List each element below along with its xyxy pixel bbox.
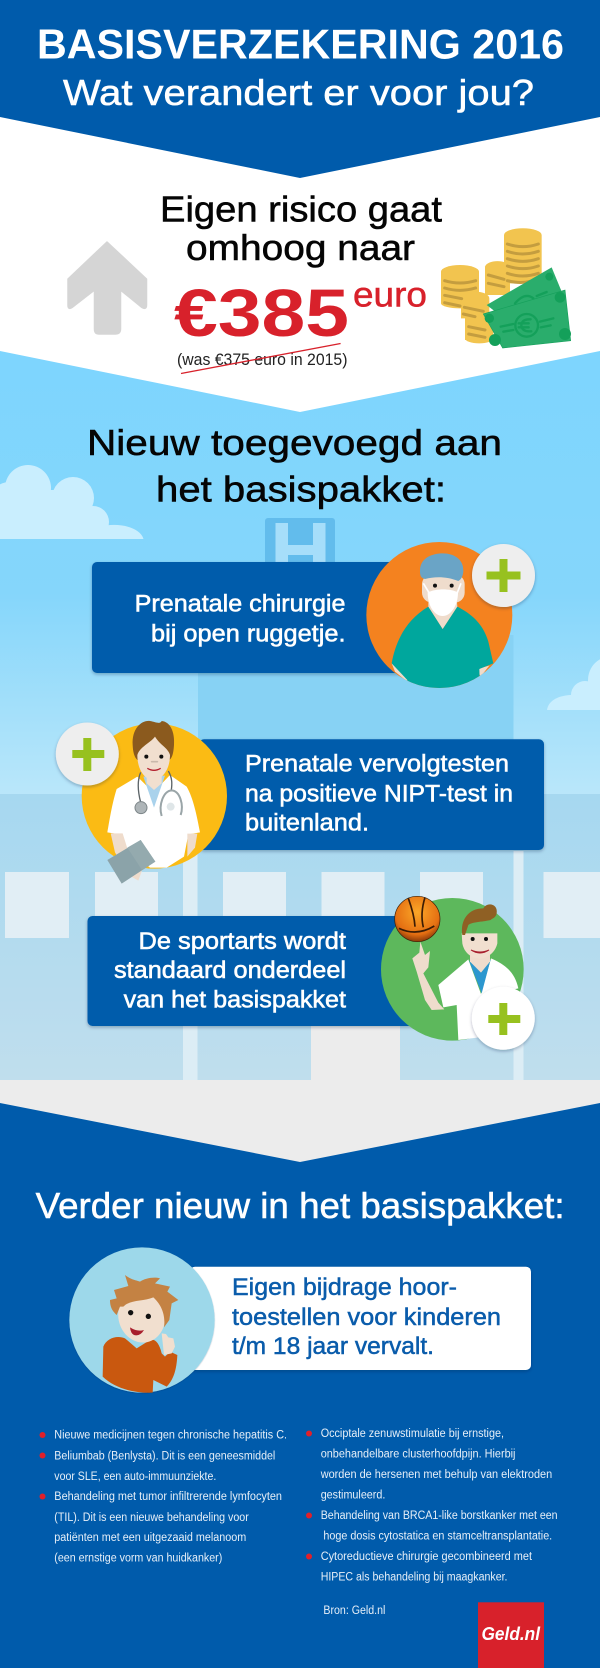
amount: 385 euro: euro <box>353 276 427 315</box>
panel: prenatale vervolgtesten: Prenatale vervolgtesten <box>245 751 509 778</box>
panel: sportarts: van het basispakket <box>124 987 346 1014</box>
bullet list right: Behandeling van BRCA1-like borstkanker met een <box>321 1510 558 1522</box>
bullet list right: HIPEC als behandeling bij maagkanker. <box>321 1571 508 1583</box>
hospital tower <box>198 635 514 805</box>
icon: plus badge <box>472 544 535 607</box>
panel: eigen bijdrage <box>190 1267 531 1370</box>
bullet list right: Occiptale zenuwstimulatie bij ernstige, <box>321 1428 504 1440</box>
icon: plus badge <box>472 987 535 1050</box>
heading: nieuw toegevoegd: het basispakket: <box>156 469 446 510</box>
pavement <box>0 1080 600 1170</box>
panel: prenatale vervolgtesten: na positieve NIPT-test in <box>245 781 513 808</box>
heading: eigen risico: omhoog naar <box>186 227 415 268</box>
title: BASISVERZEKERING 2016 <box>37 20 564 68</box>
icon: surgeon <box>366 542 512 692</box>
bullet list left: voor SLE, een auto-immuunziekte. <box>54 1471 216 1483</box>
heading: eigen risico <box>160 189 442 268</box>
bullet list right: hoge dosis cytostatica en stamceltransplantatie. <box>323 1530 552 1542</box>
logo: Geld.nl <box>478 1602 544 1668</box>
source: Bron: Geld.nl <box>323 1605 385 1617</box>
heading: nieuw toegevoegd: Nieuw toegevoegd aan <box>87 422 502 463</box>
hospital windows <box>5 872 600 938</box>
cloud right <box>547 656 600 710</box>
panel: sportarts <box>88 916 418 1026</box>
hospital pillars <box>183 851 524 1081</box>
bullet list right: Cytoreductieve chirurgie gecombineerd met <box>321 1551 533 1563</box>
white band <box>0 100 600 412</box>
previous amount: (was €375 euro in 2015) <box>177 351 348 369</box>
bullet list left: Nieuwe medicijnen tegen chronische hepatitis C. <box>54 1430 287 1442</box>
bullet list left <box>40 1430 287 1565</box>
bullet list right <box>306 1428 558 1583</box>
panel: sportarts: De sportarts wordt <box>138 928 346 955</box>
panel: eigen bijdrage: Eigen bijdrage hoor- <box>232 1274 457 1301</box>
heading: nieuw toegevoegd <box>87 422 502 510</box>
panel: prenatale vervolgtesten: buitenland. <box>245 810 369 837</box>
icon: plus badge <box>56 722 119 786</box>
subtitle: Wat verandert er voor jou? <box>63 72 534 113</box>
bullet list right: worden de hersenen met behulp van elektroden <box>320 1469 552 1481</box>
hospital lower band <box>0 794 600 1084</box>
icon: sports doctor <box>381 896 524 1041</box>
icon: up arrow <box>68 242 146 334</box>
panel: prenatale chirurgie: Prenatale chirurgie <box>135 591 346 618</box>
panel: prenatale chirurgie <box>92 562 412 673</box>
bullet list left: (een ernstige vorm van huidkanker) <box>54 1553 222 1565</box>
bullet list left: patiënten met een uitgezaaid melanoom <box>54 1532 246 1544</box>
hospital sign <box>265 518 335 570</box>
previous amount <box>177 344 348 374</box>
panel: prenatale vervolgtesten <box>199 739 544 850</box>
panel: eigen bijdrage: toestellen voor kinderen <box>232 1304 501 1331</box>
bullet list left: Behandeling met tumor infiltrerende lymfocyten <box>54 1491 282 1503</box>
bullet list left: Beliumbab (Benlysta). Dit is een geneesmiddel <box>54 1450 275 1462</box>
amount: 385 euro: €385 <box>174 276 349 351</box>
bullet list right: onbehandelbare clusterhoofdpijn. Hierbij <box>321 1448 516 1460</box>
footer section background <box>0 1103 600 1668</box>
icon: coins and money <box>441 228 571 348</box>
panel: sportarts: standaard onderdeel <box>114 957 346 984</box>
bullet list right: gestimuleerd. <box>321 1489 385 1501</box>
bullet list left: (TIL). Dit is een nieuwe behandeling voor <box>54 1512 249 1524</box>
panel: eigen bijdrage: t/m 18 jaar vervalt. <box>232 1333 434 1360</box>
icon: female doctor <box>82 721 227 884</box>
panel: prenatale chirurgie: bij open ruggetje. <box>151 621 346 648</box>
background: sky <box>0 340 600 800</box>
logo: Geld.nl: Geld.nl <box>482 1624 541 1644</box>
icon: child <box>69 1247 215 1393</box>
heading: verder nieuw: Verder nieuw in het basispakket: <box>36 1185 565 1226</box>
amount: 385 euro <box>174 276 427 351</box>
hospital door <box>311 1000 400 1082</box>
heading: eigen risico: Eigen risico gaat <box>160 189 442 230</box>
header chevron <box>0 0 600 178</box>
cloud left <box>0 465 144 539</box>
